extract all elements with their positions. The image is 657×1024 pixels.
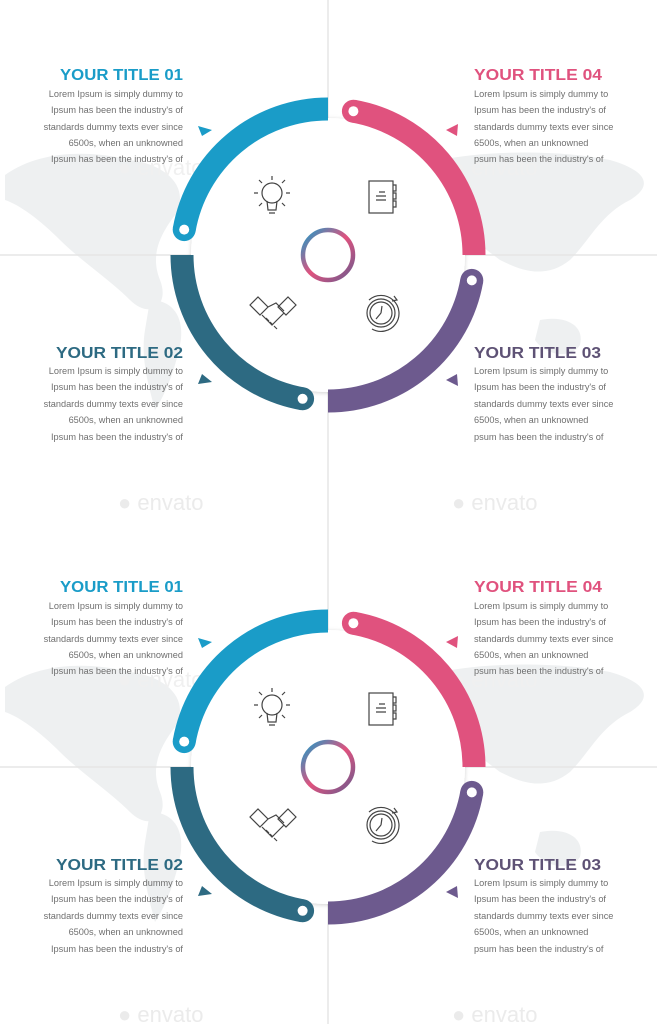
infographic: top copy — [0, 0, 657, 515]
infographic: bottom copy — [0, 512, 657, 1024]
